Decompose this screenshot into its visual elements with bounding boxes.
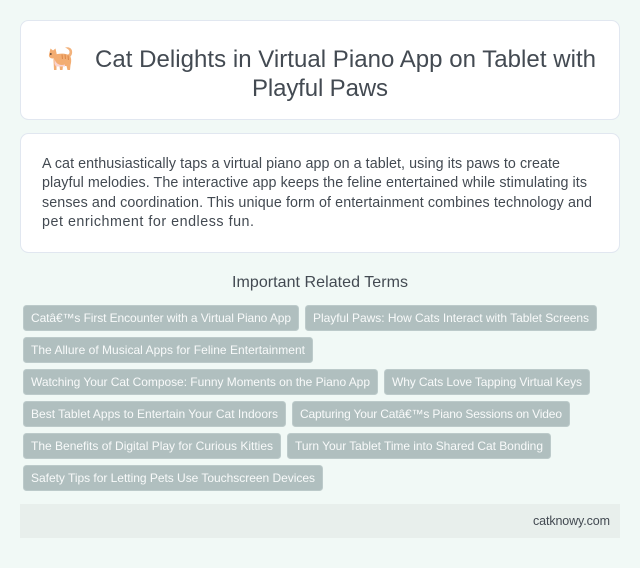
title text: Playful Paws [252, 75, 388, 102]
description text: senses and coordination. This unique form of entertainment combines technology and [42, 195, 592, 211]
tag [24, 466, 322, 490]
description text [42, 156, 592, 230]
footer: catknowy.com [533, 514, 610, 528]
description text: playful melodies. The interactive app keeps the feline entertained while stimulating its [42, 175, 587, 191]
tag: Capturing Your Catâ€™s Piano Sessions on Video [300, 407, 562, 421]
heading: related terms: Important Related Terms [232, 274, 408, 291]
panel: description card [20, 134, 620, 252]
tag: Catâ€™s First Encounter with a Virtual Piano App [31, 311, 291, 325]
tag: Best Tablet Apps to Entertain Your Cat Indoors [31, 407, 278, 421]
description text: A cat enthusiastically taps a virtual piano app on a tablet, using its paws to create [42, 156, 560, 172]
tag: Watching Your Cat Compose: Funny Moments on the Piano App [31, 375, 370, 389]
tag [24, 370, 378, 394]
tag [24, 402, 286, 426]
tag [24, 306, 298, 330]
tag [292, 402, 570, 426]
tag: Playful Paws: How Cats Interact with Tablet Screens [313, 311, 589, 325]
tag [384, 370, 590, 394]
tag: Turn Your Tablet Time into Shared Cat Bonding [295, 439, 543, 453]
title text: Cat Delights in Virtual Piano App on Tablet with [95, 46, 596, 73]
tag: The Benefits of Digital Play for Curious Kitties [31, 439, 273, 453]
panel: title card [20, 20, 620, 120]
footer [20, 504, 620, 538]
tag [288, 434, 550, 458]
tag: The Allure of Musical Apps for Feline Entertainment [31, 343, 306, 357]
tag: Safety Tips for Letting Pets Use Touchscreen Devices [31, 471, 315, 485]
title text [95, 46, 596, 102]
tag [24, 434, 280, 458]
icon: cat [49, 47, 72, 70]
panel: related term tags [24, 306, 596, 490]
tag [306, 306, 596, 330]
tag [24, 338, 312, 362]
description text: pet enrichment for endless fun. [42, 214, 254, 230]
tag: Why Cats Love Tapping Virtual Keys [392, 375, 582, 389]
